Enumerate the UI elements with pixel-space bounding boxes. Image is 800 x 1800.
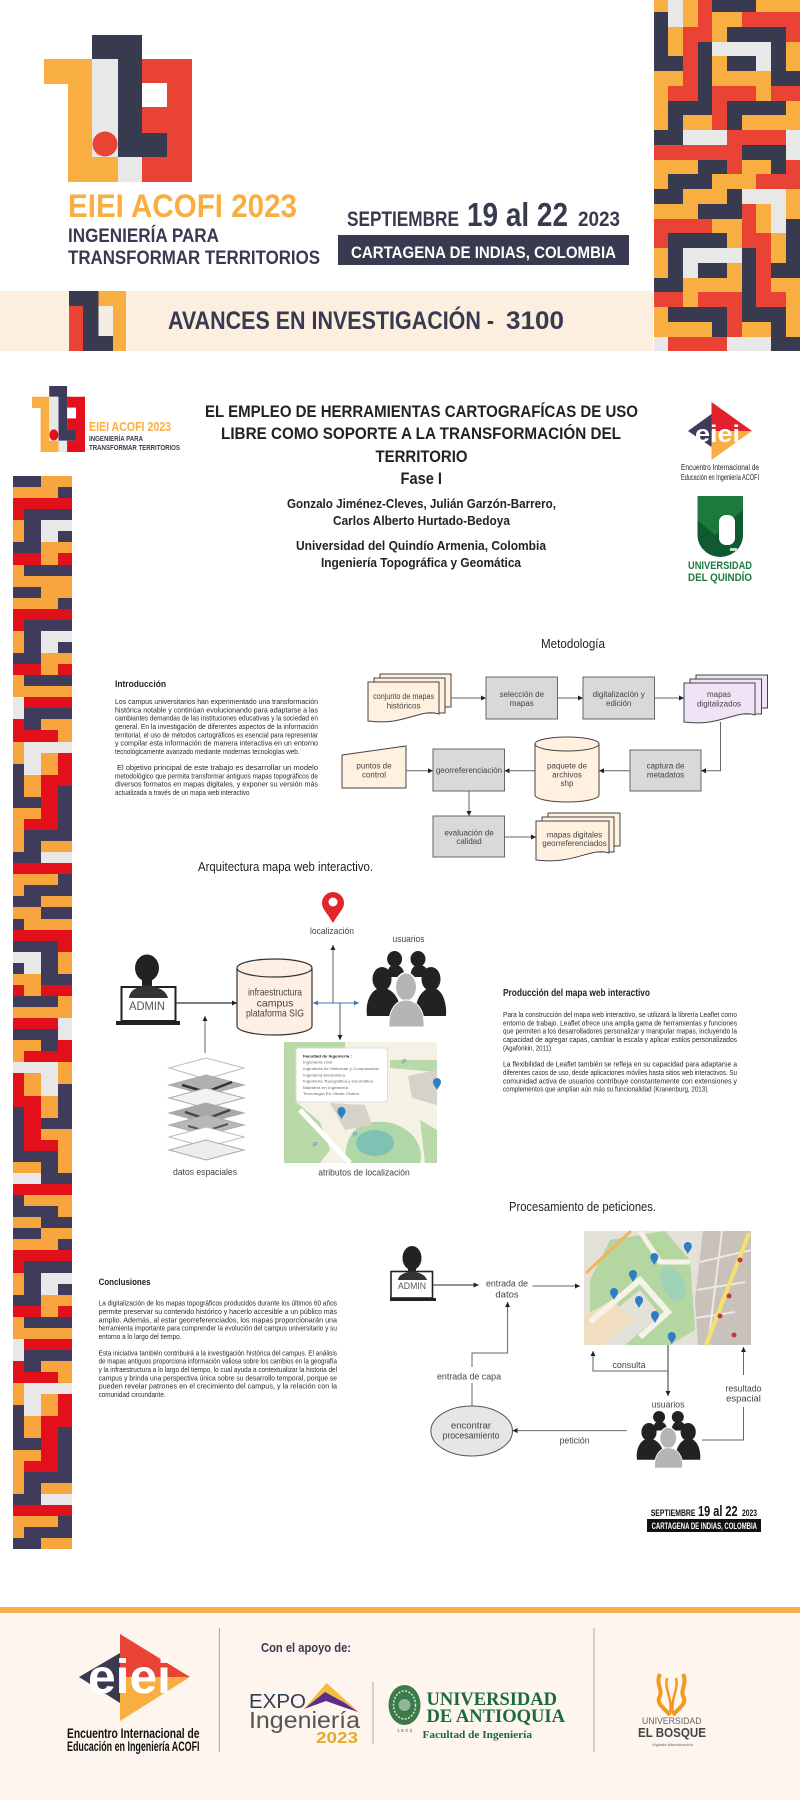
- document stack: mapas digitales georreferenciados: mapas digitales: [547, 830, 602, 840]
- logo: EIEI encuentro: [681, 402, 759, 482]
- document stack: mapas digitales georreferenciados: [536, 813, 620, 861]
- logo: EIEI encuentro: Encuentro Internacional de: [681, 463, 759, 472]
- icon: location pin: [322, 892, 344, 923]
- small event logo: INGENIERÍA PARA: [89, 434, 143, 443]
- logo: Universidad de Antioquia: Facultad de Ingeniería: [422, 1729, 533, 1741]
- event location: CARTAGENA DE INDIAS, COLOMBIA: [351, 243, 616, 262]
- text block: Conclusiones: Conclusiones: [99, 1277, 151, 1288]
- icon: users: [367, 951, 446, 1027]
- icon: admin: [116, 954, 180, 1025]
- text block: Introducción: El objetivo principal de este trabajo es desarrollar un modelo: [117, 763, 318, 772]
- logo: EIEI footer: Educación en Ingeniería ACOFI: [67, 1738, 200, 1754]
- text block: Introducción: diversos formatos en mapas digitales, y exponer su versión más: [115, 780, 318, 789]
- arrow: [654, 697, 684, 699]
- date stamp: SEPTIEMBRE: [651, 1508, 696, 1519]
- label: entrada de datos: [486, 1278, 528, 1300]
- event name: EIEI ACOFI 2023: [68, 188, 297, 224]
- ellipse: encontrar procesamiento: encontrar: [451, 1420, 491, 1432]
- arrow: consulta: [593, 1351, 668, 1371]
- label: usuarios: usuarios: [392, 934, 425, 945]
- cylinder: infraestructura campus plataforma SIG: campus: [257, 998, 293, 1010]
- label: datos espaciales: datos espaciales: [173, 1167, 237, 1178]
- text block: Conclusiones: y la infraestructura a lo largo del tiempo, lo cual ayuda a contextualizar la historia del: [99, 1365, 337, 1374]
- logo: Universidad del Quindío: UNIVERSIDAD: [688, 560, 752, 572]
- document stack: conjunto de mapas históricos: históricos: [387, 702, 420, 710]
- cylinder: paquete de archivos shp: shp: [561, 779, 574, 788]
- box: digitalización y edición: edición: [606, 699, 631, 708]
- cylinder: paquete de archivos shp: paquete de: [547, 762, 588, 770]
- text block: Conclusiones: pueden revelar patrones en el crecimiento del campus, y la relación con la: [99, 1382, 337, 1391]
- event name: INGENIERÍA PARA: [68, 225, 219, 247]
- logo: EIEI footer: Encuentro Internacional de: [67, 1725, 200, 1741]
- map: campus popup: Ingeniería Civil: [303, 1060, 332, 1064]
- arrow: [433, 1284, 479, 1286]
- text block: Producción del mapa web interactivo: diferentes casos de uso, desde aplicaciones móviles hasta sitios web interactivos. Su: [503, 1068, 737, 1077]
- document stack: mapas digitalizados: [684, 675, 768, 723]
- diagram: procesamiento de peticiones: [390, 1231, 762, 1468]
- logo: EIEI encuentro: eiei: [695, 421, 740, 448]
- ellipse: encontrar procesamiento: [431, 1406, 512, 1456]
- event dates: 2023: [578, 208, 620, 231]
- section label: AVANCES EN INVESTIGACIÓN -: [168, 305, 494, 335]
- small event logo: [32, 386, 180, 452]
- logo: EIEI 1.13 mark: [44, 35, 192, 182]
- arrow: entrada de capa: [472, 1302, 508, 1406]
- logo: EIEI footer: [67, 1634, 200, 1754]
- map: campus popup: Tecnología En Obras Civiles: [303, 1091, 359, 1096]
- arrow: [468, 791, 470, 816]
- cylinder: infraestructura campus plataforma SIG: [237, 959, 312, 1035]
- label: usuarios: usuarios: [652, 1400, 685, 1410]
- arrow: blue double arrow: [313, 1002, 359, 1004]
- label: entrada de datos: entrada de: [486, 1278, 528, 1290]
- event location: [338, 235, 629, 265]
- event dates: [347, 196, 620, 233]
- title: LIBRE COMO SOPORTE A LA TRANSFORMACIÓN DEL: [221, 424, 621, 443]
- logo: Expo Ingeniería 2023: 2023: [316, 1730, 358, 1747]
- logo: Universidad del Quindío: DEL QUINDÍO: [688, 571, 752, 584]
- box: evaluación de calidad: [433, 816, 504, 857]
- title: [205, 402, 638, 488]
- box: captura de metadatos: metadatos: [647, 770, 684, 780]
- text block: Producción del mapa web interactivo: complementos que amplían aún más su funcionalidad (Kranenburg, 2013).: [503, 1084, 709, 1093]
- label: entrada de capa: entrada de capa: [437, 1372, 502, 1382]
- document stack: conjunto de mapas históricos: conjunto de mapas: [373, 692, 434, 701]
- title: TERRITORIO: [376, 448, 468, 466]
- arrow: to map: [339, 1003, 341, 1040]
- arrow: [451, 697, 486, 699]
- box: captura de metadatos: [630, 750, 701, 791]
- arrow: [406, 770, 433, 772]
- arrow: down to usuarios: [667, 1345, 669, 1396]
- text block: Producción del mapa web interactivo: Producción del mapa web interactivo: [503, 988, 650, 999]
- box: captura de metadatos: captura de: [647, 762, 685, 770]
- text block: Conclusiones: de mapas antiguos proporciona información valiosa sobre los cambios en la geografía: [99, 1357, 337, 1366]
- authors: Gonzalo Jiménez-Cleves, Julián Garzón-Barrero,: [287, 496, 556, 511]
- arrow: admin to platform: [176, 1002, 237, 1004]
- box: selección de mapas: mapas: [510, 699, 534, 708]
- text block: Conclusiones: La digitalización de los mapas topográficos producidos durante los últimos 60 años: [99, 1299, 337, 1308]
- logo: Universidad de Antioquia: [388, 1685, 565, 1741]
- authors: [287, 496, 556, 528]
- event dates: 19 al 22: [467, 196, 568, 233]
- authors: Carlos Alberto Hurtado-Bedoya: [333, 513, 511, 528]
- label: consulta: consulta: [612, 1360, 646, 1371]
- map: campus popup: Facultad de Ingeniería :: [303, 1054, 352, 1058]
- affiliation: [296, 538, 547, 570]
- arrow: to localización: [332, 945, 334, 1003]
- text block: Producción del mapa web interactivo: comunidad activa de usuarios contribuye constantemente con extensiones y: [503, 1076, 737, 1085]
- map: campus popup: P: [313, 1142, 318, 1149]
- icon: map layers: [169, 1058, 244, 1160]
- map: campus popup: Maestría en Ingeniería: [303, 1085, 349, 1090]
- logo: Expo Ingeniería 2023: Ingeniería: [249, 1707, 360, 1733]
- text block: Introducción: histórica notable y continúan evolucionando para adaptarse a las: [115, 705, 318, 714]
- cylinder: infraestructura campus plataforma SIG: plataforma SIG: [246, 1008, 304, 1020]
- parallelogram: puntos de control: control: [362, 770, 386, 780]
- text block: Conclusiones: comunidad circundante.: [99, 1390, 166, 1399]
- map: campus popup: Ingeniería Electrónica: [303, 1072, 346, 1078]
- cylinder: paquete de archivos shp: archivos: [552, 770, 582, 780]
- map: campus overview: [584, 1231, 751, 1345]
- affiliation: Universidad del Quindío Armenia, Colombia: [296, 538, 547, 553]
- document stack: conjunto de mapas históricos: [368, 674, 451, 722]
- logo: EIEI footer: eiei: [88, 1651, 171, 1704]
- arrow: [599, 770, 630, 772]
- document stack: mapas digitalizados: digitalizados: [697, 700, 741, 708]
- text block: Producción del mapa web interactivo: (Agafonkin, 2011).: [503, 1043, 553, 1052]
- text block: Introducción: Los campus universitarios han experimentado una transformación: [115, 697, 318, 706]
- heading: Arquitectura: Arquitectura mapa web interactivo.: [198, 859, 373, 874]
- date stamp: 2023: [742, 1508, 757, 1519]
- map: campus popup: Ingeniería Topográfica y Geomática: [303, 1078, 374, 1084]
- logo: Universidad El Bosque: EL BOSQUE: [638, 1725, 706, 1740]
- decorative pattern: left strip: [13, 476, 72, 1549]
- decorative pattern: top right: [654, 0, 800, 351]
- text block: Introducción: actualizada a través de un mapa web interactivo: [115, 788, 250, 797]
- text block: Introducción: territorial, el uso de métodos cartográficos es esencial para representar: [115, 730, 319, 739]
- box: selección de mapas: [486, 677, 558, 719]
- section label: 3100: [506, 307, 564, 335]
- box: digitalización y edición: [583, 677, 654, 719]
- text block: Producción del mapa web interactivo: capacidad de agregar capas, cambiar la escala y aplicar estilos personalizados: [503, 1035, 737, 1044]
- text block: Conclusiones: entorno a lo largo del tiempo.: [99, 1332, 182, 1341]
- text block: Introducción: metodológico que permita transformar antiguos mapas topográficos de: [115, 771, 318, 780]
- arrow: [532, 1285, 580, 1287]
- icon: admin: ADMIN: [129, 999, 165, 1013]
- logo: Expo Ingeniería 2023: EXPO: [249, 1691, 306, 1713]
- box: digitalización y edición: digitalización y: [593, 690, 645, 699]
- arrow: [504, 836, 536, 838]
- label: resultado espacial: resultado: [726, 1384, 762, 1394]
- text block: Introducción: general. En la investigación de diferentes aspectos de la información: [115, 722, 318, 731]
- arrow: [701, 722, 720, 771]
- box: georreferenciación: georreferenciación: [436, 766, 502, 775]
- event dates: SEPTIEMBRE: [347, 208, 459, 231]
- document stack: mapas digitales georreferenciados: georreferenciados: [542, 839, 607, 848]
- cylinder: paquete de archivos shp: [535, 737, 599, 802]
- title: EL EMPLEO DE HERRAMIENTAS CARTOGRAFÍCAS DE USO: [205, 402, 638, 421]
- small event logo: EIEI ACOFI 2023: [89, 419, 171, 434]
- cylinder: infraestructura campus plataforma SIG: infraestructura: [248, 986, 302, 998]
- map: campus popup: P: [353, 1132, 358, 1139]
- arrow: spatial data up: [204, 1016, 206, 1053]
- arrow: [504, 770, 535, 772]
- text block: Conclusiones: amplio. Además, al estar georreferenciados, los mapas proporcionarán una: [99, 1315, 337, 1324]
- text block: Introducción: Introducción: [115, 679, 166, 690]
- logo: Universidad de Antioquia: 1803: [397, 1728, 412, 1733]
- flowchart: metodología: [342, 674, 768, 861]
- label: atributos de localización: atributos de localización: [318, 1168, 410, 1178]
- text block: Conclusiones: [99, 1277, 337, 1399]
- box: evaluación de calidad: calidad: [456, 837, 482, 846]
- text block: Introducción: tecnológicamente avanzado mediante modernas tecnologías web.: [115, 747, 300, 756]
- label: entrada de datos: datos: [495, 1290, 519, 1300]
- text block: Conclusiones: campus y brinda una perspectiva única sobre su desarrollo temporal, porque se: [99, 1373, 337, 1382]
- logo: Universidad del Quindío: [688, 496, 752, 584]
- logo: Universidad El Bosque: UNIVERSIDAD: [642, 1716, 702, 1726]
- map: campus popup: P: [402, 1059, 407, 1066]
- event name: TRANSFORMAR TERRITORIOS: [68, 248, 320, 269]
- text block: Producción del mapa web interactivo: La flexibilidad de Leaflet también se refleja en su capacidad para adaptarse a: [503, 1060, 737, 1069]
- text block: Introducción: y compilar esta información de manera interactiva en un entorno: [115, 739, 318, 748]
- document stack: mapas digitalizados: mapas: [707, 690, 731, 699]
- label: localización: localización: [310, 926, 354, 937]
- map: campus popup: Ingeniería de Sistemas y Computación: [303, 1066, 379, 1071]
- date stamp: 19 al 22: [698, 1503, 738, 1520]
- logo: EIEI encuentro: Educación en Ingeniería ACOFI: [681, 473, 759, 482]
- icon: admin: ADMIN: [398, 1281, 426, 1292]
- text block: Introducción: cambiantes demandas de las instituciones educativas y la sociedad en: [115, 714, 318, 723]
- title: Fase I: [400, 470, 442, 488]
- text block: Producción del mapa web interactivo: Para la construcción del mapa web interactivo, se utilizará la librería Leaflet como: [503, 1010, 737, 1019]
- arrow: resultado espacial: [702, 1347, 744, 1440]
- ellipse: encontrar procesamiento: procesamiento: [442, 1430, 500, 1442]
- text block: Conclusiones: Esta iniciativa también contribuirá a la investigación histórica del campus. El análisis: [99, 1348, 337, 1357]
- header band: [0, 291, 653, 351]
- logo: Expo Ingeniería 2023: [249, 1683, 361, 1747]
- heading: Con el apoyo de: Con el apoyo de:: [261, 1640, 351, 1655]
- heading: Metodología: Metodología: [541, 636, 606, 651]
- icon: users: [637, 1411, 700, 1468]
- footer panel: [0, 1607, 800, 1800]
- diagram: arquitectura mapa web: [116, 892, 446, 1178]
- date stamp: [647, 1503, 761, 1532]
- arrow: [558, 697, 583, 699]
- logo: Universidad de Antioquia: UNIVERSIDAD: [426, 1689, 557, 1710]
- text block: Introducción: [115, 679, 319, 797]
- text block: Conclusiones: permite preservar su contenido histórico y hacerlo accesible a un público más: [99, 1307, 337, 1316]
- event name: [68, 188, 320, 269]
- label: resultado espacial: [726, 1384, 762, 1404]
- label: resultado espacial: espacial: [726, 1394, 761, 1404]
- map: campus popup: [284, 1042, 441, 1163]
- parallelogram: puntos de control: [342, 746, 406, 788]
- label: petición: petición: [560, 1436, 590, 1446]
- box: selección de mapas: selección de: [500, 690, 545, 699]
- text block: Producción del mapa web interactivo: entorno de trabajo. Leaflet ofrece una amplia gama de herramientas y funciones: [503, 1018, 737, 1027]
- small event logo: TRANSFORMAR TERRITORIOS: [89, 443, 180, 452]
- affiliation: Ingeniería Topográfica y Geomática: [321, 555, 522, 570]
- box: evaluación de calidad: evaluación de: [444, 828, 494, 838]
- icon: mini logo: [69, 291, 126, 351]
- box: georreferenciación: [433, 749, 504, 791]
- logo: Universidad El Bosque: [638, 1674, 706, 1747]
- text block: Conclusiones: herramienta importante para comprender la evolución del campus universitario y su: [99, 1324, 337, 1333]
- parallelogram: puntos de control: puntos de: [356, 762, 392, 770]
- logo: Universidad de Antioquia: DE ANTIOQUIA: [426, 1706, 565, 1727]
- text block: Producción del mapa web interactivo: [503, 988, 737, 1093]
- divider: [219, 1628, 594, 1752]
- heading: Procesamiento de peticiones: Procesamiento de peticiones.: [509, 1199, 656, 1214]
- icon: admin: [390, 1246, 436, 1301]
- text block: Producción del mapa web interactivo: que permiten a los desarrolladores personalizar y manipular mapas, incluyendo la: [503, 1027, 737, 1036]
- logo: Universidad El Bosque: Vigilada Mineducación: [652, 1743, 693, 1747]
- arrow: petición: [512, 1430, 627, 1432]
